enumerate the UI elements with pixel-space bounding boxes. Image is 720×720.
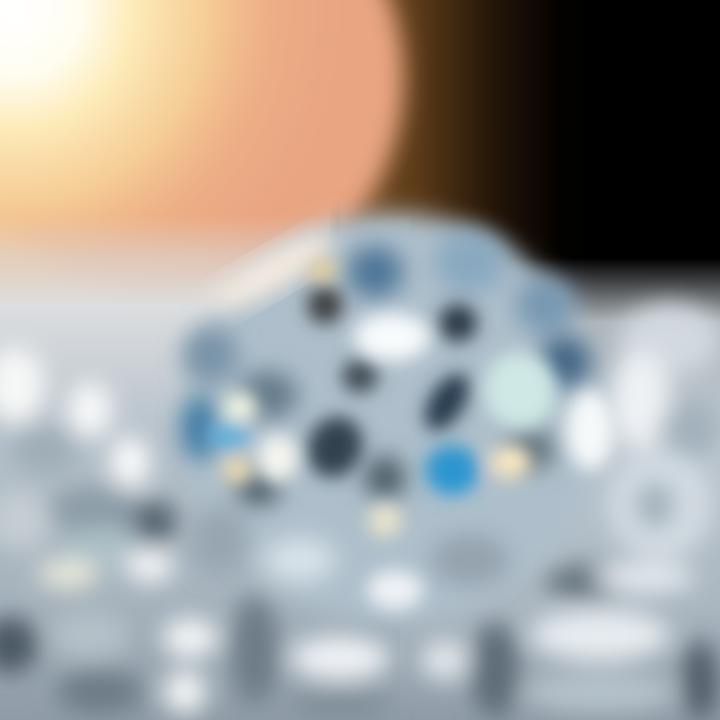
facets: bright — [206, 259, 614, 610]
diamond: main stone — [181, 213, 614, 623]
stones: left, right and bottom clusters — [0, 304, 720, 720]
diamond body — [184, 213, 600, 623]
facets: dark — [297, 286, 478, 487]
facets: muted — [181, 230, 591, 586]
glow: bright light source — [0, 0, 345, 340]
glow: peach orb — [0, 0, 404, 340]
background: frosted diamond field — [0, 215, 720, 720]
diamond rim highlight — [201, 220, 343, 324]
